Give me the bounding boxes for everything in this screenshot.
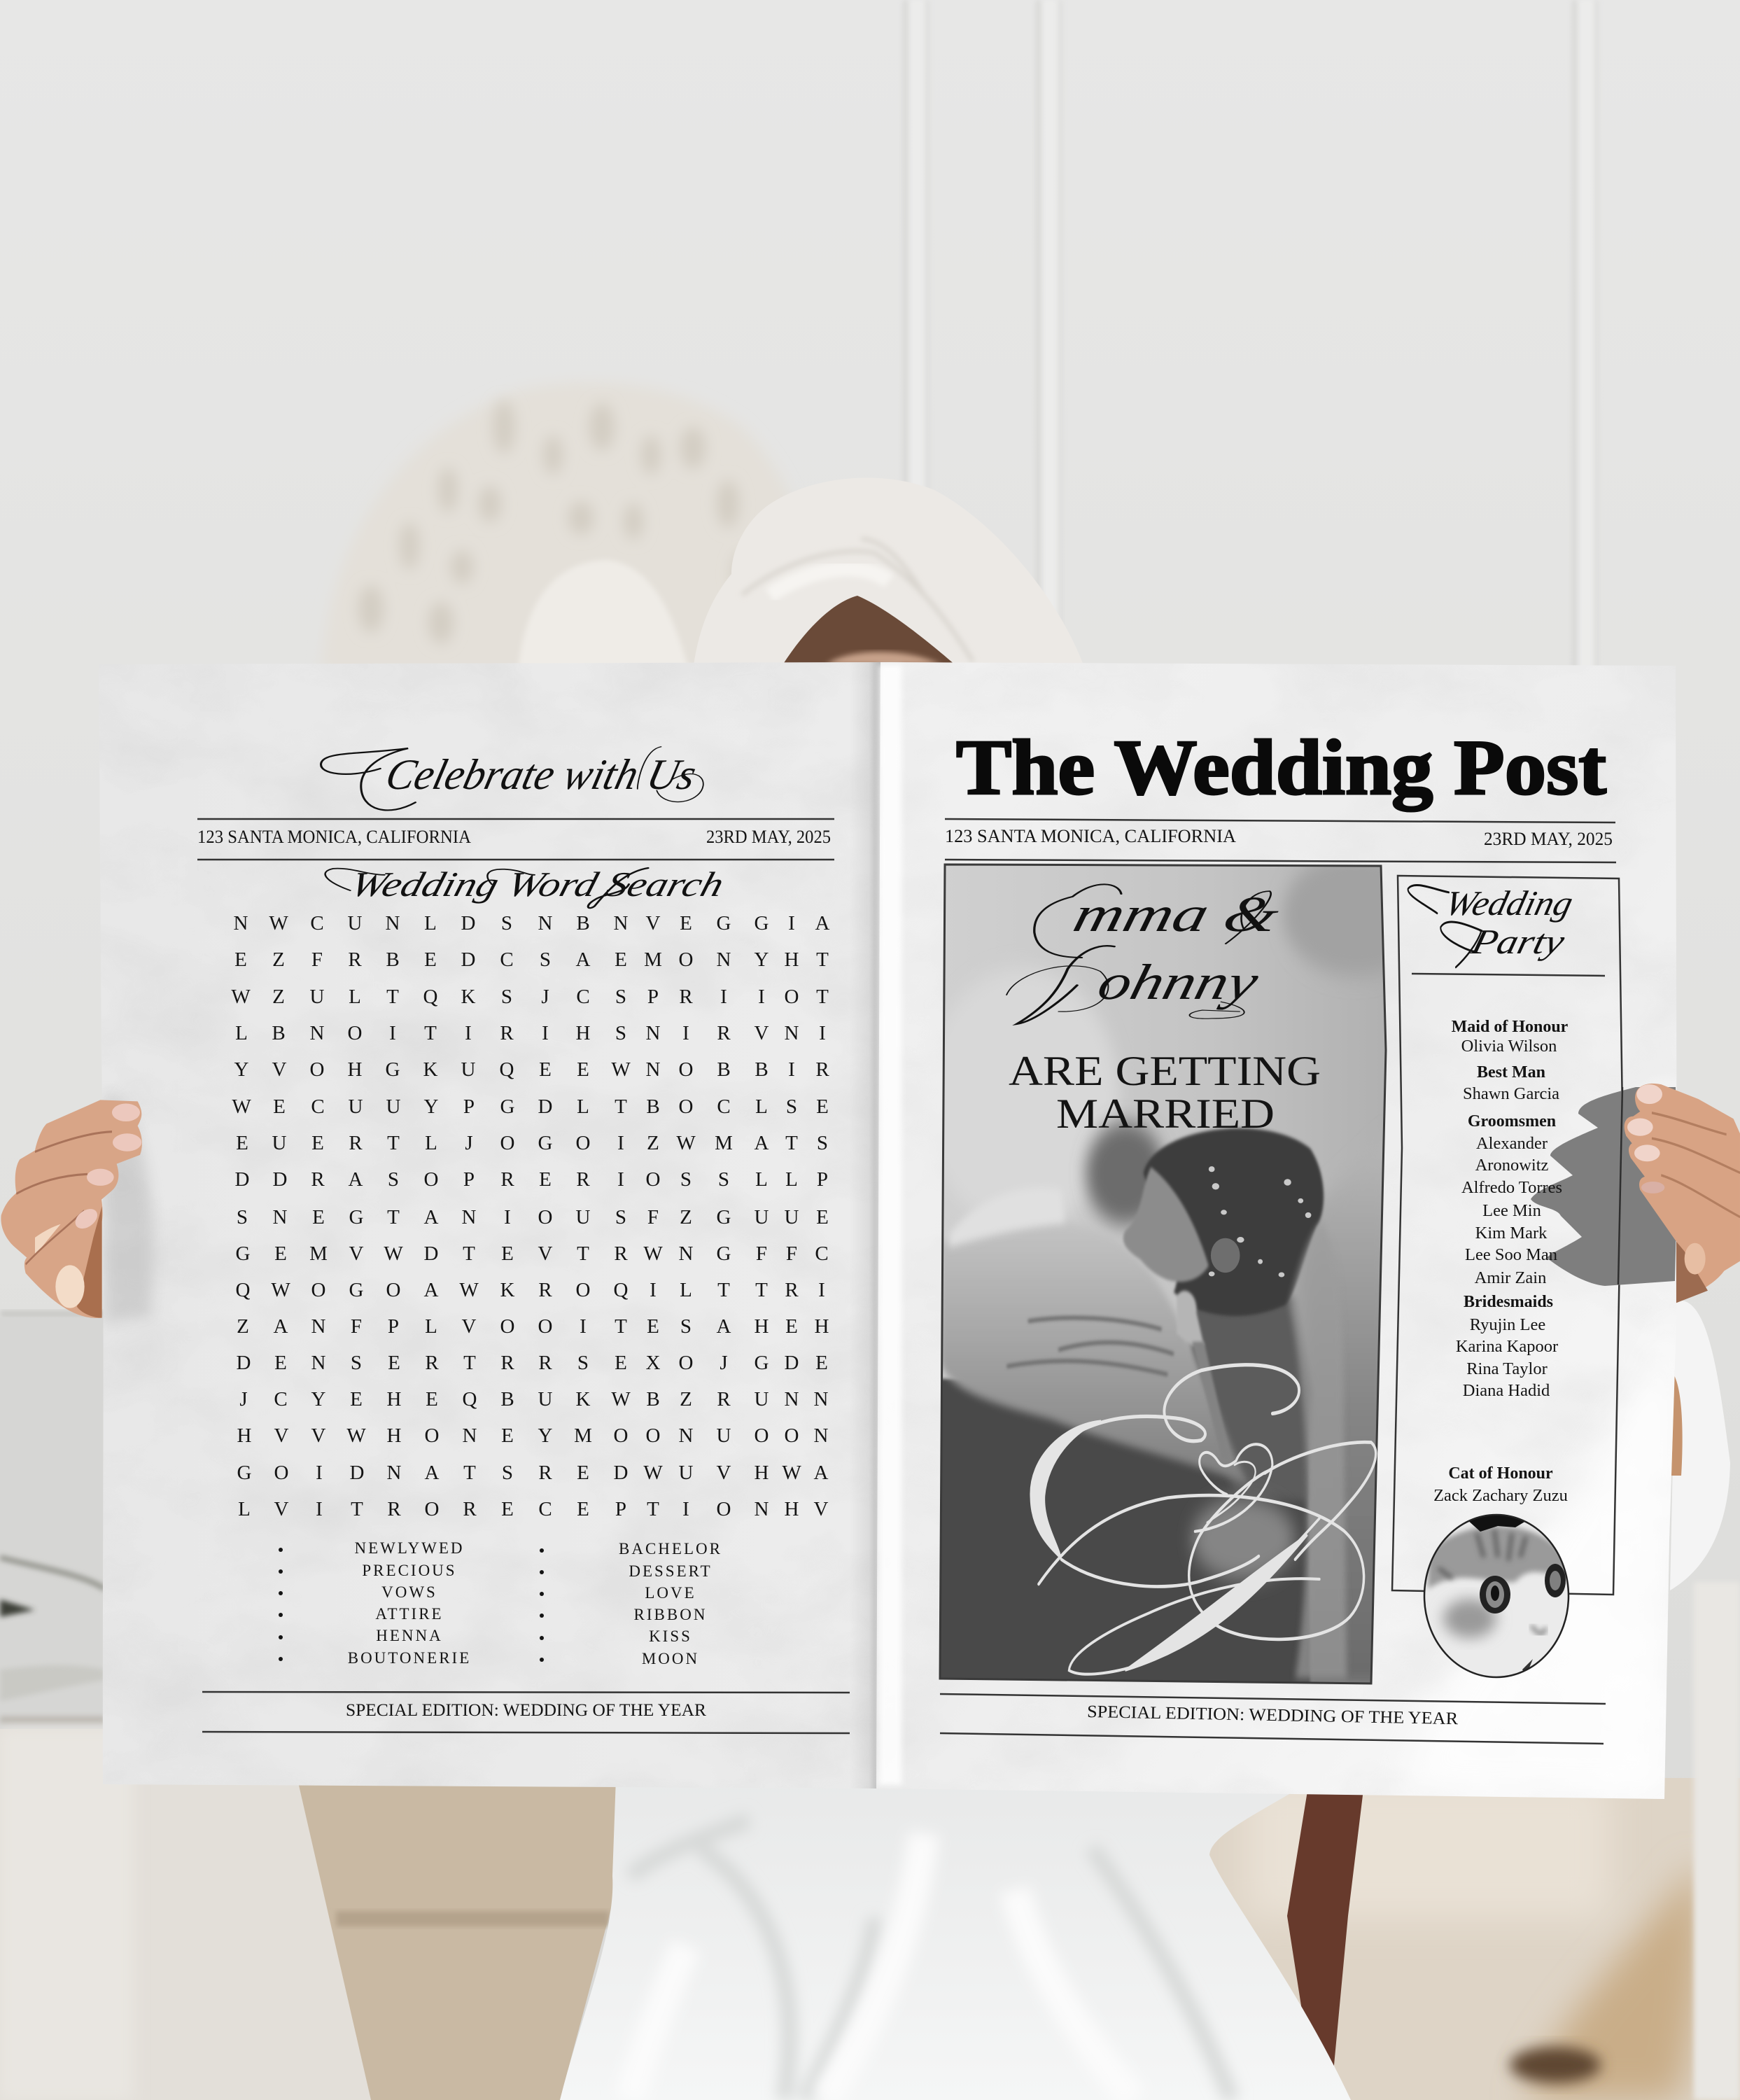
right page footer bbox=[940, 1694, 1606, 1744]
wedding party names: Aronowitz bbox=[1475, 1156, 1549, 1175]
monogram E and J with heart bbox=[1030, 1365, 1376, 1674]
word list, column two: KISS bbox=[649, 1628, 692, 1645]
couple names in script: ohnny bbox=[1093, 954, 1265, 1010]
left page heading: Celebrate with Us bbox=[321, 747, 703, 810]
wedding party names: Karina Kapoor bbox=[1456, 1337, 1558, 1356]
word list, column one: VOWS bbox=[381, 1583, 437, 1601]
left page address and date bar: 123 SANTA MONICA, CALIFORNIA bbox=[197, 827, 471, 847]
word list, column two: DESSERT bbox=[629, 1562, 713, 1580]
left page address and date bar: 23RD MAY, 2025 bbox=[706, 827, 831, 847]
wedding party names: Amir Zain bbox=[1475, 1268, 1546, 1287]
wedding party names: Lee Min bbox=[1482, 1201, 1541, 1220]
table with blurred plates at lower left bbox=[0, 1558, 105, 1723]
wedding party names: Kim Mark bbox=[1475, 1224, 1548, 1242]
headline: are getting married: ARE GETTING bbox=[1009, 1048, 1321, 1094]
couple names in script: mma & bbox=[1068, 886, 1285, 942]
word search letter grid: ZANFPLVOOITESAHEH bbox=[237, 1315, 829, 1338]
wedding party names: Shawn Garcia bbox=[1463, 1084, 1559, 1103]
chair cushion on the right bbox=[1190, 1582, 1740, 2100]
word search letter grid: YVOHGKUQEEWNOBBIR bbox=[234, 1058, 829, 1081]
word list, column two: LOVE bbox=[645, 1584, 696, 1602]
chair leg bbox=[1287, 1778, 1365, 2100]
headline: are getting married: MARRIED bbox=[1056, 1091, 1275, 1137]
right page address and date bar bbox=[945, 819, 1616, 862]
wedding party names: Best Man bbox=[1477, 1063, 1545, 1082]
beige wall panel below the paper bbox=[294, 1764, 630, 2100]
head towel and hair bbox=[694, 478, 1083, 665]
word search letter grid: DENSERTRRSEXOJGDE bbox=[237, 1352, 828, 1374]
word search letter grid: WZULTQKSJCSPRIIOT bbox=[231, 986, 829, 1008]
wedding party heading: Wedding bbox=[1441, 884, 1577, 923]
wedding party names: Alexander bbox=[1476, 1134, 1548, 1153]
bathrobe bbox=[560, 1778, 1351, 2100]
left hand holding the paper bbox=[1, 1100, 142, 1318]
headline: are getting married bbox=[1009, 1048, 1321, 1137]
word list, column one bbox=[279, 1539, 471, 1667]
masthead: The Wedding Post: The Wedding Post bbox=[956, 724, 1606, 811]
left page footer: SPECIAL EDITION: WEDDING OF THE YEAR bbox=[346, 1701, 706, 1720]
word search letter grid: LVITRORECEPTIONHV bbox=[238, 1498, 829, 1520]
word search letter grid: HVVWHONEYMOONUOON bbox=[237, 1424, 829, 1447]
word search letter grid: WECUUYPGDLTBOCLSE bbox=[232, 1096, 829, 1118]
left page heading: Celebrate with Us: Celebrate with Us bbox=[381, 750, 701, 799]
word list, column two: MOON bbox=[642, 1650, 699, 1667]
word search letter grid: GEMVWDTEVTRWNGFFC bbox=[236, 1242, 829, 1265]
word list, column two: RIBBON bbox=[634, 1606, 707, 1623]
right page footer: SPECIAL EDITION: WEDDING OF THE YEAR bbox=[1087, 1702, 1459, 1728]
word list, column one: PRECIOUS bbox=[362, 1562, 457, 1579]
wedding party names: Groomsmen bbox=[1468, 1112, 1556, 1130]
word search letter grid: LBNOITIRIHSNIRVNI bbox=[235, 1022, 826, 1044]
word search letter grid: EZFRBEDCSAEMONYHT bbox=[234, 948, 829, 971]
left page address and date bar bbox=[197, 819, 834, 860]
right paper page bbox=[875, 658, 1680, 1806]
word list, column one: NEWLYWED bbox=[354, 1539, 465, 1557]
wedding party heading: Party bbox=[1467, 923, 1569, 961]
wedding party sidebar box bbox=[1392, 876, 1622, 1595]
tablecloth bbox=[0, 1729, 371, 2100]
word list, column one: ATTIRE bbox=[375, 1605, 444, 1623]
word search letter grid: NWCUNLDSNBNVEGGIA bbox=[234, 912, 830, 934]
cat of honour caption: Cat of Honour bbox=[1448, 1464, 1553, 1483]
sleeve on the right arm bbox=[1670, 1301, 1730, 1590]
word search letter grid: DDRASOPRERIOSSLLP bbox=[235, 1168, 828, 1191]
wedding party heading bbox=[1408, 884, 1577, 967]
word list, column one: BOUTONERIE bbox=[348, 1649, 471, 1667]
cat portrait oval bbox=[1421, 1511, 1575, 1680]
word search letter grid: GOIDNATSREDWUVHWA bbox=[237, 1462, 829, 1484]
cat of honour caption: Zack Zachary Zuzu bbox=[1433, 1486, 1568, 1505]
word list, column two: BACHELOR bbox=[619, 1540, 722, 1558]
right hand holding the paper bbox=[1625, 1084, 1740, 1303]
wedding party names: Diana Hadid bbox=[1463, 1381, 1550, 1400]
word list, column one: HENNA bbox=[376, 1627, 443, 1644]
word search heading: Wedding Word Search bbox=[346, 866, 728, 904]
wedding party names: Alfredo Torres bbox=[1461, 1178, 1562, 1197]
word search letter grid: SNEGTANIOUSFZGUUE bbox=[237, 1206, 829, 1228]
wedding party names: Olivia Wilson bbox=[1461, 1037, 1557, 1056]
wedding party names: Ryujin Lee bbox=[1470, 1315, 1545, 1334]
couple names in script bbox=[1006, 884, 1285, 1024]
word search letter grid bbox=[231, 912, 830, 1520]
wedding party names bbox=[1452, 1018, 1622, 1400]
word search letter grid: EUERTLJOGOIZWMATS bbox=[236, 1132, 828, 1154]
wedding party names: Lee Soo Man bbox=[1465, 1245, 1557, 1264]
word search letter grid: QWOGOAWKROQILTTRI bbox=[236, 1279, 825, 1301]
plaster sculpture behind the paper bbox=[322, 382, 809, 672]
wedding party names: Rina Taylor bbox=[1466, 1359, 1548, 1378]
wedding party names: Maid of Honour bbox=[1452, 1018, 1569, 1036]
couple photo panel bbox=[939, 864, 1387, 1684]
word list, column two bbox=[540, 1540, 722, 1667]
cat of honour caption bbox=[1433, 1464, 1568, 1505]
right page address and date bar: 123 SANTA MONICA, CALIFORNIA bbox=[945, 826, 1236, 846]
left paper page bbox=[91, 658, 882, 1792]
wedding party names: Bridesmaids bbox=[1464, 1293, 1553, 1311]
right page address and date bar: 23RD MAY, 2025 bbox=[1484, 829, 1613, 849]
hand shadow on right page bbox=[1531, 1087, 1677, 1286]
word search letter grid: JCYEHEQBUKWBZRUNN bbox=[239, 1388, 829, 1410]
